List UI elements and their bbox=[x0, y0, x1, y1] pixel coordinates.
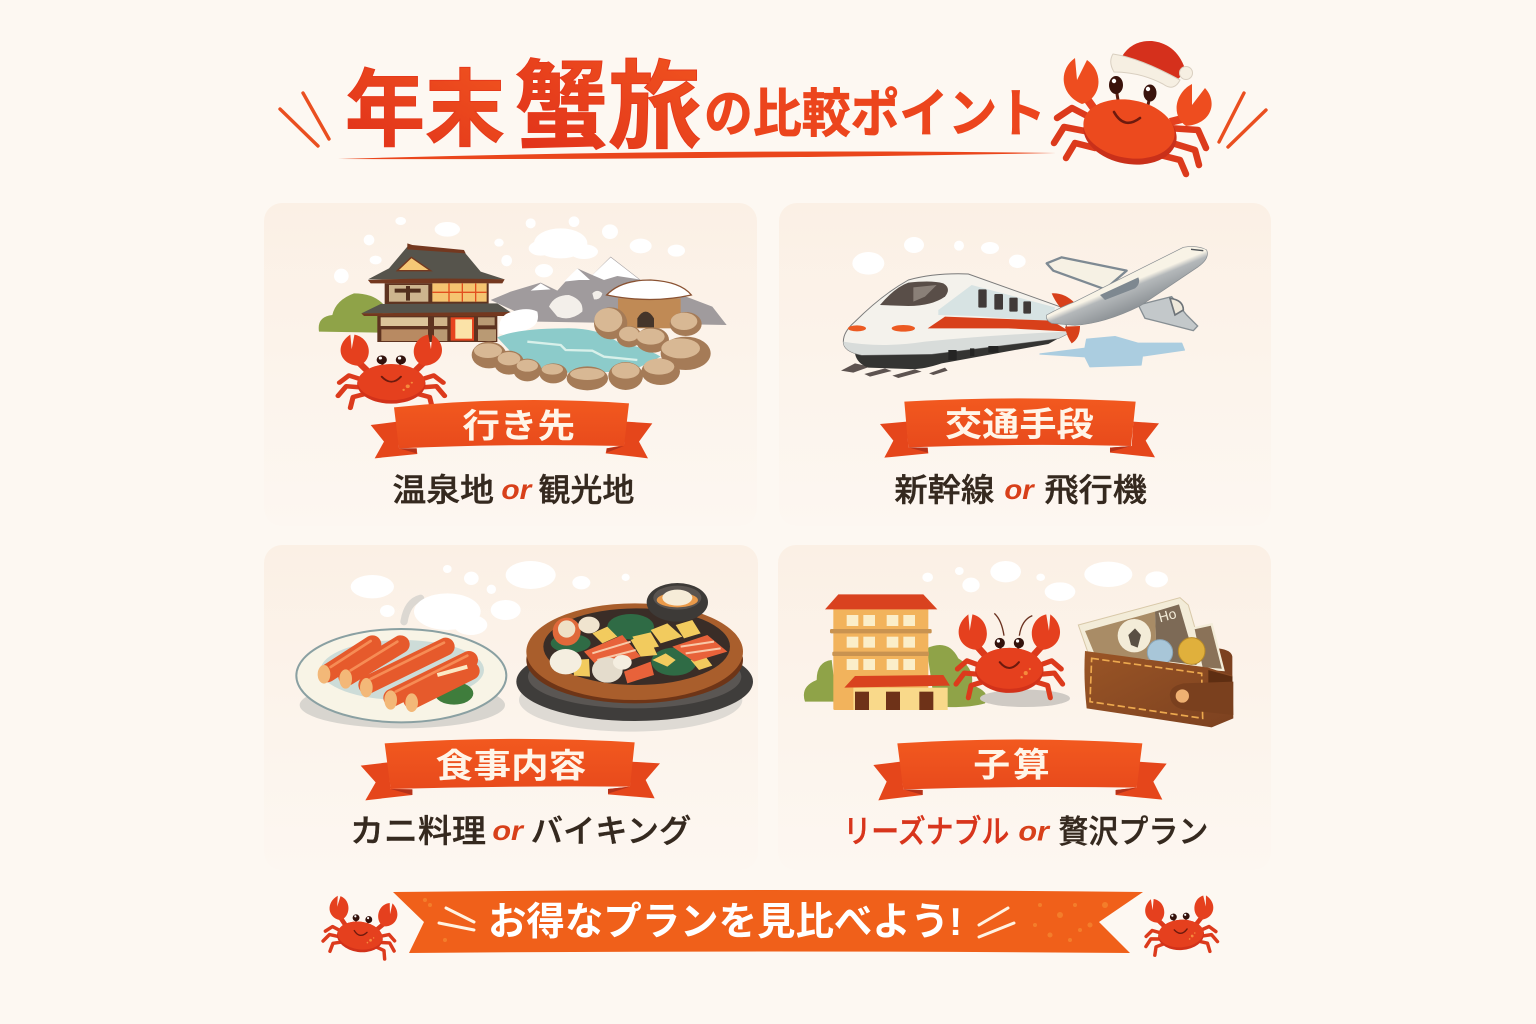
ryokan bbox=[361, 243, 511, 342]
bushes bbox=[804, 645, 987, 707]
comparison text: リーズナブル or 贅沢プラン: リーズナブル bbox=[843, 813, 1009, 849]
banner texture bbox=[423, 898, 1108, 942]
wallet with cash bbox=[1078, 598, 1233, 727]
panel: destination bbox=[264, 203, 757, 526]
bush bbox=[319, 293, 384, 333]
mountains bbox=[491, 257, 727, 325]
buffet hot pot bbox=[516, 583, 753, 732]
comparison text: 温泉地 or 観光地 bbox=[392, 472, 634, 508]
comparison text: リーズナブル or 贅沢プラン: 贅沢プラン bbox=[1058, 813, 1208, 849]
steam clouds bbox=[351, 561, 630, 635]
call to action banner bbox=[393, 890, 1143, 953]
icon: santa crab bbox=[1054, 41, 1212, 174]
comparison text: 新幹線 or 飛行機: 飛行機 bbox=[1044, 472, 1147, 508]
illustration: crab legs and buffet dish bbox=[296, 561, 753, 732]
title underline bbox=[338, 151, 1056, 159]
crab shadow bbox=[980, 690, 1070, 707]
crab eyes bbox=[1109, 76, 1156, 105]
clouds bbox=[852, 237, 1026, 275]
clouds bbox=[922, 561, 1168, 601]
airplane bbox=[1046, 247, 1207, 343]
bullet train bbox=[841, 274, 1070, 378]
comparison text: カニ料理 or バイキング: バイキング bbox=[531, 813, 691, 849]
panel: budget bbox=[778, 545, 1271, 870]
hot spring hut bbox=[607, 280, 691, 328]
comparison text: 温泉地 or 観光地: or bbox=[501, 474, 534, 505]
crab legs bbox=[1054, 108, 1206, 174]
heading ribbon: 食事内容 bbox=[361, 739, 660, 800]
illustration: bullet train and airplane bbox=[841, 237, 1207, 378]
crab claws bbox=[1064, 58, 1212, 126]
puddle bbox=[1040, 337, 1184, 367]
illustration: hotel, crab and wallet bbox=[804, 561, 1233, 727]
steam bbox=[499, 309, 538, 336]
comparison text: 温泉地 or 観光地: 温泉地 bbox=[392, 472, 494, 508]
heading ribbon: 行き先 bbox=[371, 400, 652, 458]
banner text: お得なプランを見比べよう! bbox=[488, 901, 962, 944]
comparison text: カニ料理 or バイキング: or bbox=[492, 815, 525, 846]
sparkle lines bbox=[439, 908, 1014, 937]
comparison text: リーズナブル or 贅沢プラン: or bbox=[1018, 815, 1051, 846]
crab arms bbox=[1082, 92, 1186, 122]
title text: 年末: 年末 bbox=[345, 63, 505, 157]
title bbox=[338, 54, 1056, 161]
heading ribbon: 子算: 子算 bbox=[973, 748, 1053, 785]
comparison text: 新幹線 or 飛行機 bbox=[894, 472, 1147, 508]
snow clouds bbox=[334, 216, 685, 283]
heading ribbon: 交通手段: 交通手段 bbox=[945, 407, 1094, 444]
heading ribbon: 交通手段 bbox=[880, 398, 1159, 458]
icon: crab bbox=[956, 613, 1063, 698]
icon: crab bbox=[338, 335, 445, 408]
hotel bbox=[825, 594, 950, 710]
heading ribbon: 子算 bbox=[873, 739, 1167, 800]
hot spring pool bbox=[497, 328, 661, 373]
santa hat bbox=[1111, 41, 1192, 87]
heading ribbon: 行き先: 行き先 bbox=[462, 408, 575, 445]
wallet with cash: Ho bbox=[1157, 605, 1178, 625]
comparison text: カニ料理 or バイキング: カニ料理 bbox=[350, 813, 486, 849]
comparison text: カニ料理 or バイキング bbox=[350, 813, 691, 849]
title text: 蟹旅: 蟹旅 bbox=[515, 54, 701, 161]
rocks bbox=[472, 307, 711, 390]
burst lines: right bbox=[1219, 93, 1266, 147]
comparison text: 新幹線 or 飛行機: 新幹線 bbox=[894, 472, 994, 508]
burst lines: left bbox=[280, 93, 329, 146]
icon: small crab right bbox=[1143, 895, 1218, 956]
title text: の比較ポイント: の比較ポイント bbox=[704, 86, 1046, 144]
crab leg plate bbox=[296, 629, 506, 728]
heading ribbon: 食事内容: 食事内容 bbox=[436, 748, 586, 785]
comparison text: 新幹線 or 飛行機: or bbox=[1004, 474, 1036, 505]
comparison text: 温泉地 or 観光地: 観光地 bbox=[538, 472, 634, 508]
panel: transport bbox=[779, 203, 1271, 526]
comparison text: リーズナブル or 贅沢プラン bbox=[843, 813, 1208, 849]
panel: meal bbox=[264, 545, 758, 870]
crab body bbox=[1078, 94, 1182, 172]
illustration: ryokan and hot spring bbox=[319, 216, 727, 408]
icon: small crab left bbox=[322, 895, 401, 960]
